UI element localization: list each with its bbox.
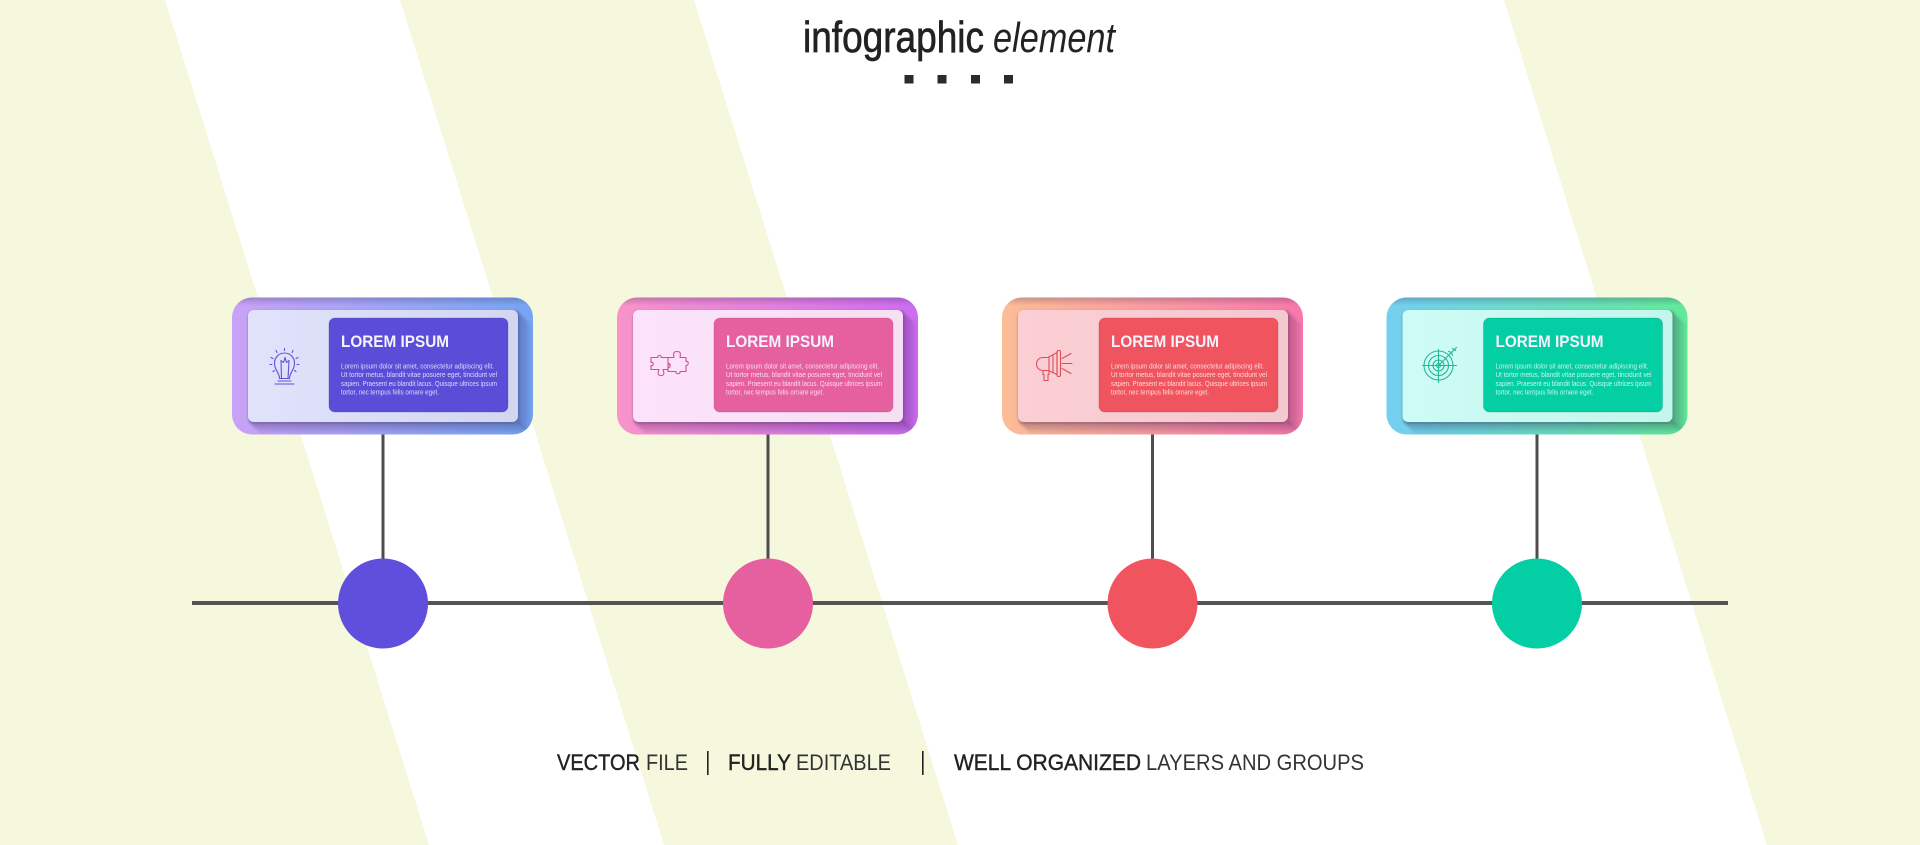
panel: card 4: Lorem ipsum dolor sit amet, consectetur adipiscing elit. bbox=[1496, 362, 1648, 370]
panel: card 1: Lorem ipsum dolor sit amet, consectetur adipiscing elit. bbox=[341, 362, 494, 370]
panel: card 4: tortor, nec tempus felis ornare eget. bbox=[1496, 388, 1594, 396]
panel: card 2: LOREM IPSUM bbox=[726, 333, 834, 351]
panel: card 3 bbox=[1002, 298, 1303, 434]
panel: card 1: Ut tortor metus, blandit vitae posuere eget, tincidunt vel bbox=[341, 370, 497, 379]
panel: card 1: LOREM IPSUM bbox=[341, 333, 449, 351]
panel: card 3: sapien. Praesent eu blandit lacus. Quisque ultrices ipsum bbox=[1111, 379, 1267, 388]
footer text: FULLY bbox=[728, 750, 791, 775]
footer text: WELL ORGANIZED bbox=[954, 750, 1141, 775]
connector stem 1 bbox=[382, 434, 384, 564]
panel: card 1 bbox=[232, 298, 533, 434]
panel: card 4: sapien. Praesent eu blandit lacus. Quisque ultrices ipsum bbox=[1496, 379, 1652, 388]
connector stem 4 bbox=[1536, 434, 1538, 564]
icon: puzzle pieces bbox=[651, 352, 688, 376]
footer text: VECTOR bbox=[557, 750, 640, 775]
panel: card 2: Lorem ipsum dolor sit amet, consectetur adipiscing elit. bbox=[726, 362, 879, 370]
footer text: LAYERS AND GROUPS bbox=[1146, 750, 1364, 775]
panel: card 1: tortor, nec tempus felis ornare eget. bbox=[341, 388, 439, 396]
panel: card 3: Ut tortor metus, blandit vitae posuere eget, tincidunt vel bbox=[1111, 370, 1267, 379]
panel: card 2: Ut tortor metus, blandit vitae posuere eget, tincidunt vel bbox=[726, 370, 882, 379]
panel: card 4: Ut tortor metus, blandit vitae posuere eget, tincidunt vel bbox=[1496, 370, 1652, 379]
panel: card 3: tortor, nec tempus felis ornare eget. bbox=[1111, 388, 1209, 396]
panel: card 2: sapien. Praesent eu blandit lacus. Quisque ultrices ipsum bbox=[726, 379, 882, 388]
title dots bbox=[904, 75, 1013, 84]
timeline node 1 bbox=[338, 558, 428, 648]
panel: card 2: tortor, nec tempus felis ornare eget. bbox=[726, 388, 824, 396]
connector stem 2 bbox=[766, 434, 770, 564]
panel: card 3: Lorem ipsum dolor sit amet, consectetur adipiscing elit. bbox=[1111, 362, 1264, 370]
footer text bbox=[557, 750, 1364, 775]
panel: card 1: sapien. Praesent eu blandit lacus. Quisque ultrices ipsum bbox=[341, 379, 497, 388]
panel: card 4: LOREM IPSUM bbox=[1496, 333, 1604, 351]
timeline node 3 bbox=[1108, 558, 1198, 648]
panel: card 4 bbox=[1386, 298, 1688, 434]
icon: target bbox=[1422, 348, 1456, 382]
title: infographic bbox=[803, 13, 984, 62]
title: element bbox=[993, 14, 1117, 61]
timeline node 2 bbox=[723, 558, 813, 648]
footer text: EDITABLE bbox=[796, 750, 891, 775]
timeline node 4 bbox=[1492, 558, 1582, 648]
connector stem 3 bbox=[1151, 434, 1154, 564]
panel: card 3: LOREM IPSUM bbox=[1111, 333, 1219, 351]
title bbox=[803, 13, 1117, 62]
panel: card 2 bbox=[617, 298, 918, 434]
footer text: FILE bbox=[646, 750, 688, 775]
icon: megaphone bbox=[1036, 350, 1072, 380]
timeline axis bbox=[192, 601, 1728, 605]
icon: light bulb bbox=[270, 348, 299, 384]
